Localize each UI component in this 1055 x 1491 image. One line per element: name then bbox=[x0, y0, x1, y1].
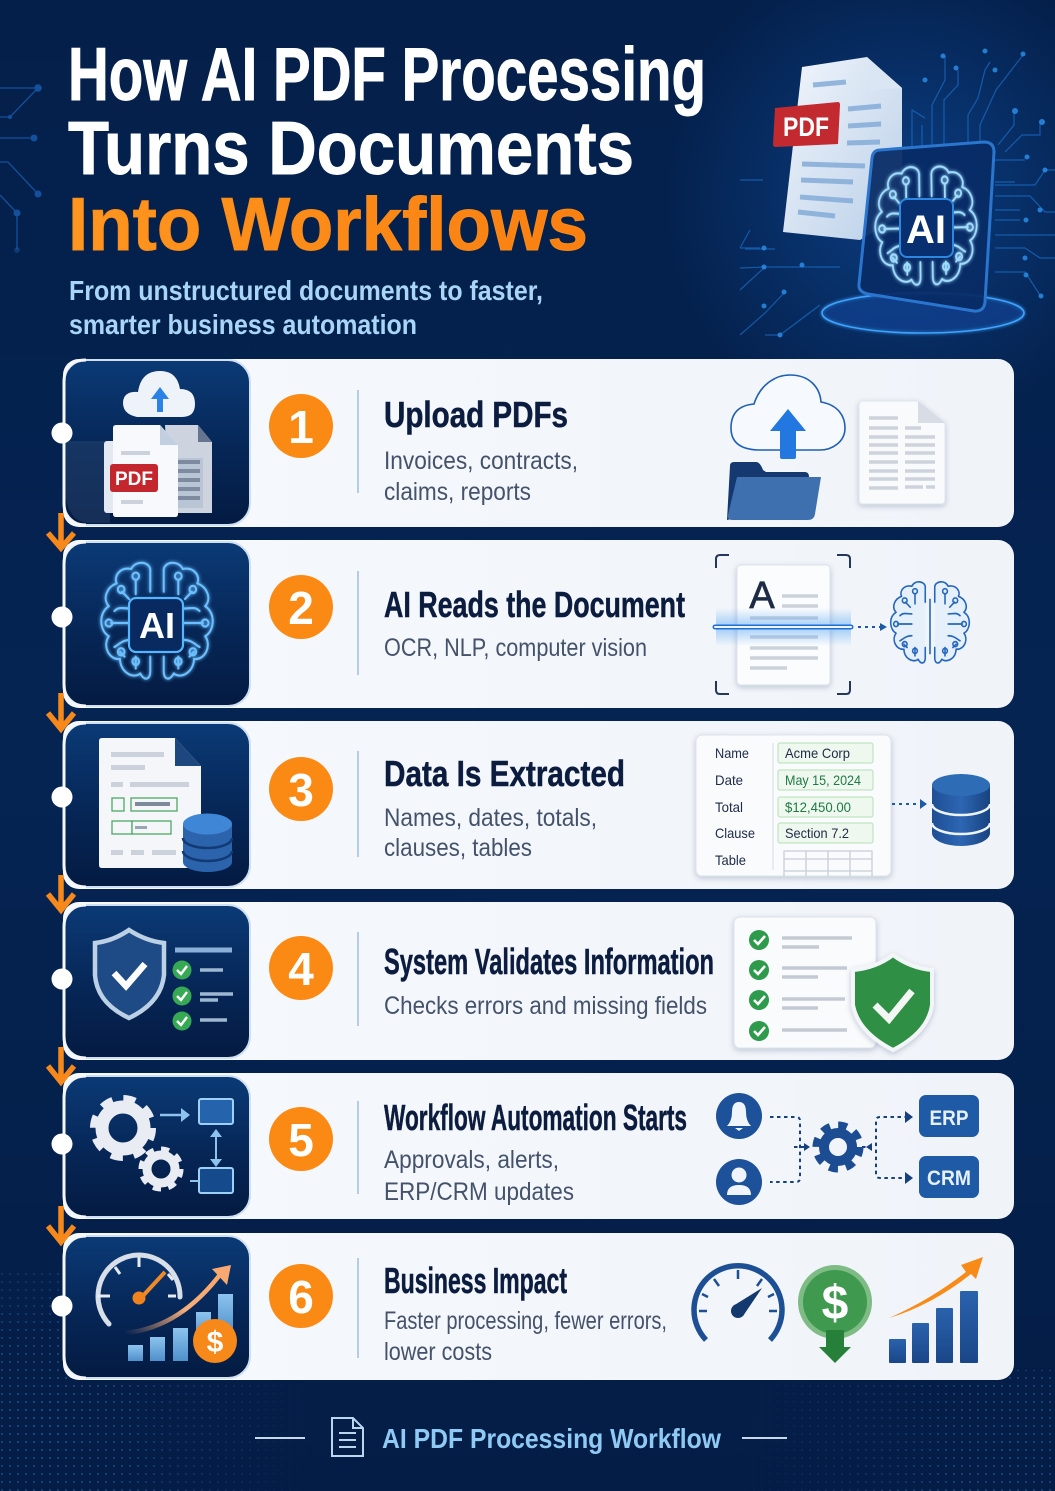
step 2 icon panel bbox=[64, 542, 250, 706]
step 1 number: 1 bbox=[288, 401, 314, 453]
step 6 description bbox=[384, 1307, 667, 1366]
footer bbox=[255, 1418, 787, 1456]
step 3 description bbox=[384, 804, 597, 862]
timeline: white connector line and dots bbox=[52, 360, 86, 1378]
step 5 number bbox=[269, 1107, 333, 1171]
step 2 number bbox=[269, 575, 333, 639]
step 2 number: 2 bbox=[288, 582, 314, 634]
step 6 icon panel bbox=[64, 1236, 250, 1378]
step 1 number bbox=[269, 394, 333, 458]
title: How AI PDF Processing bbox=[68, 32, 706, 116]
step 2 description: OCR, NLP, computer vision bbox=[384, 634, 647, 662]
step 3 number bbox=[269, 757, 333, 821]
step 2 illustration: scanned document and brain bbox=[715, 555, 969, 694]
step 3 number: 3 bbox=[288, 764, 314, 816]
step 4 number bbox=[269, 936, 333, 1000]
orange flow arrows between steps bbox=[48, 513, 74, 1242]
step 1 heading: Upload PDFs bbox=[384, 394, 568, 435]
step 6 heading: Business Impact bbox=[384, 1260, 567, 1301]
subtitle: smarter business automation bbox=[69, 309, 417, 340]
step 4 number: 4 bbox=[288, 943, 314, 995]
footer: AI PDF Processing Workflow bbox=[382, 1423, 721, 1454]
step 5 description: ERP/CRM updates bbox=[384, 1178, 574, 1206]
step 3 extracted data table: Date bbox=[715, 772, 743, 788]
step 1 icon panel bbox=[64, 360, 250, 525]
step 1 card bbox=[63, 359, 1014, 527]
step 6 description: Faster processing, fewer errors, bbox=[384, 1307, 667, 1335]
step 5 description: Approvals, alerts, bbox=[384, 1146, 559, 1174]
step 5 number: 5 bbox=[288, 1114, 314, 1166]
step 4 card bbox=[63, 902, 1014, 1060]
step 2 card bbox=[63, 540, 1014, 708]
step 3 extracted data table: $12,450.00 bbox=[785, 799, 851, 815]
title bbox=[68, 32, 706, 266]
step 2 illustration: scanned document and brain: A bbox=[749, 575, 775, 617]
step 3 extracted data table: Name bbox=[715, 745, 749, 761]
step 6 card bbox=[63, 1233, 1014, 1380]
subtitle bbox=[69, 275, 543, 340]
subtitle: From unstructured documents to faster, bbox=[69, 275, 543, 306]
step 5 illustration: alerts, gear, ERP and CRM: CRM bbox=[927, 1167, 971, 1190]
step 3 description: Names, dates, totals, bbox=[384, 804, 597, 832]
step 4 icon panel bbox=[64, 905, 250, 1058]
step 5 description bbox=[384, 1146, 574, 1206]
step 4 heading: System Validates Information bbox=[384, 941, 714, 982]
step 3 extracted data table: Acme Corp bbox=[785, 745, 850, 761]
title: Turns Documents bbox=[68, 106, 634, 190]
step 5 illustration: alerts, gear, ERP and CRM bbox=[716, 1093, 979, 1205]
step 1 description: Invoices, contracts, bbox=[384, 447, 578, 475]
step 5 card bbox=[63, 1073, 1014, 1219]
step 1 illustration: cloud, folder, document bbox=[727, 375, 945, 520]
step 6 illustration: gauge, dollar, growth chart: $ bbox=[822, 1277, 849, 1330]
step 3 card bbox=[63, 721, 1014, 889]
hero illustration: PDF document and AI chip bbox=[740, 48, 1055, 338]
step 2 heading: AI Reads the Document bbox=[384, 584, 685, 625]
step 5 icon panel bbox=[64, 1076, 250, 1217]
step 6 number: 6 bbox=[288, 1271, 314, 1323]
step 5 heading: Workflow Automation Starts bbox=[384, 1097, 687, 1138]
step 6 description: lower costs bbox=[384, 1338, 492, 1366]
step 3 dotted arrow and database bbox=[892, 774, 990, 846]
step 3 description: clauses, tables bbox=[384, 834, 532, 862]
hero illustration: PDF document and AI chip: AI bbox=[906, 208, 946, 252]
step 6 illustration: gauge, dollar, growth chart bbox=[694, 1257, 983, 1363]
step 2 icon panel: AI bbox=[139, 605, 175, 646]
step 3 heading: Data Is Extracted bbox=[384, 753, 625, 794]
step 4 description: Checks errors and missing fields bbox=[384, 992, 707, 1020]
step 5 illustration: alerts, gear, ERP and CRM: ERP bbox=[930, 1107, 968, 1130]
step 3 extracted data table: Section 7.2 bbox=[785, 825, 849, 841]
step 3 extracted data table: Total bbox=[715, 799, 743, 815]
step 3 icon panel bbox=[64, 723, 250, 887]
step 3 extracted data table bbox=[696, 735, 891, 876]
step 3 extracted data table: Table bbox=[715, 852, 746, 868]
title: Into Workflows bbox=[68, 182, 588, 266]
step 3 extracted data table: Clause bbox=[715, 825, 755, 841]
hero illustration: PDF document and AI chip: PDF bbox=[783, 112, 829, 142]
step 6 icon panel: $ bbox=[207, 1326, 224, 1359]
step 1 description bbox=[384, 447, 578, 506]
step 1 description: claims, reports bbox=[384, 478, 531, 506]
step 4 illustration: checklist and shield bbox=[734, 917, 932, 1050]
step 1 icon panel: PDF bbox=[115, 469, 153, 490]
step 6 number bbox=[269, 1264, 333, 1328]
step 3 extracted data table: May 15, 2024 bbox=[785, 772, 861, 788]
